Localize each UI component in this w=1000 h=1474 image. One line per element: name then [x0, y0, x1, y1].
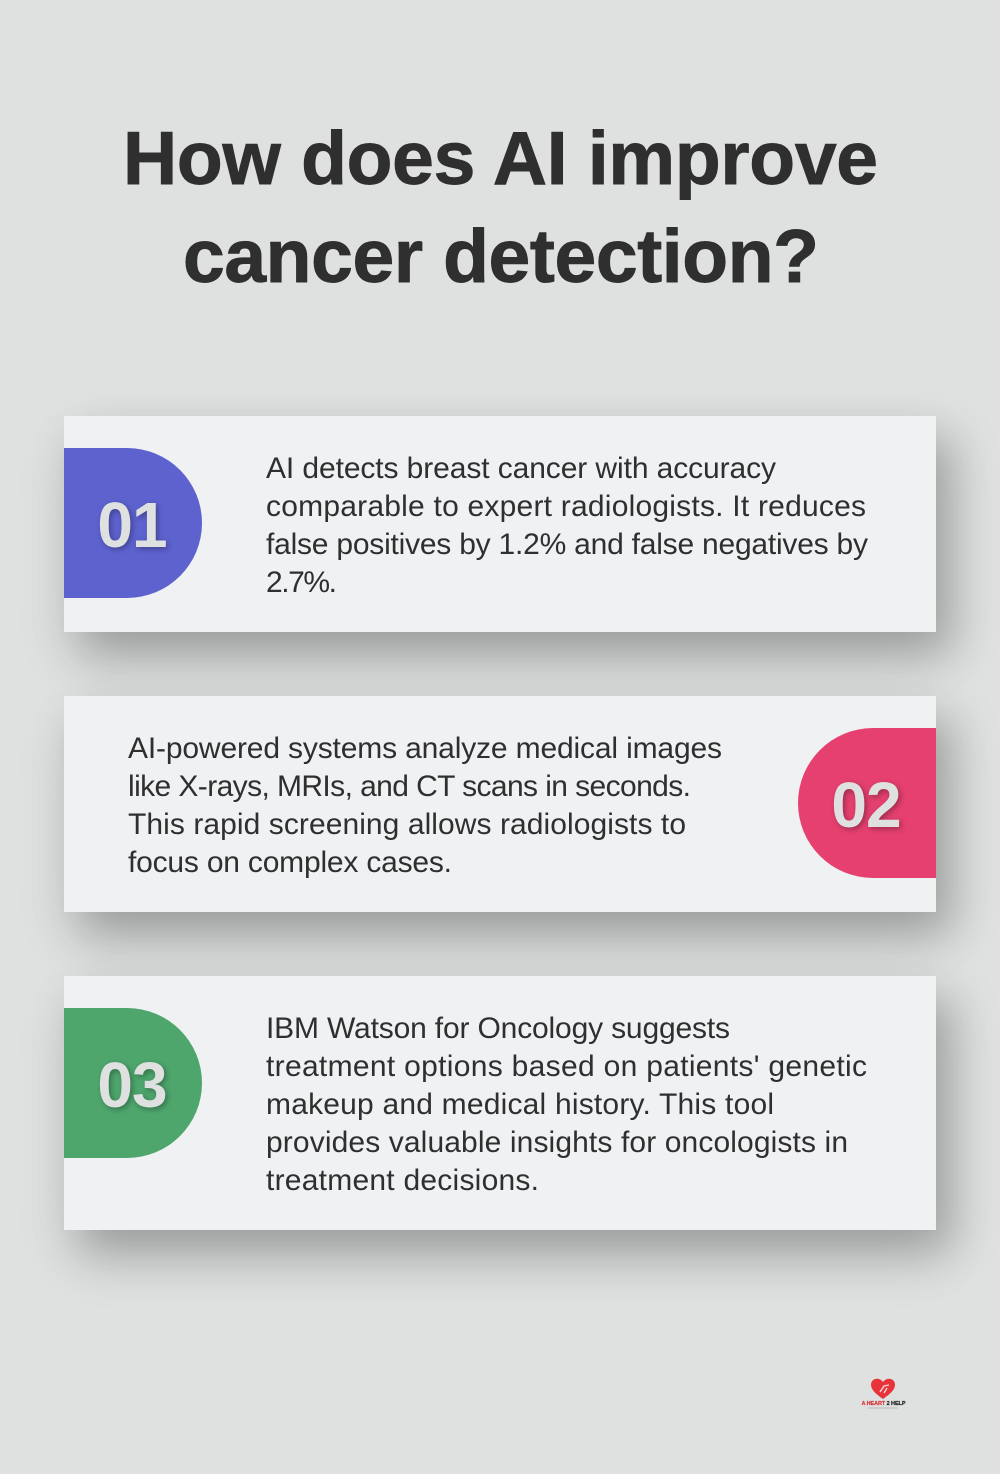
logo: A Heart 2 Help [862, 1378, 906, 1408]
text block: step 02: AI-powered systems analyze medical images [128, 732, 722, 765]
text block: step 03: makeup and medical history. This tool [266, 1088, 774, 1121]
text block: step 03: treatment options based on patients' genetic [266, 1050, 867, 1083]
badge: 02: 02 [831, 769, 901, 841]
panel: step 03 IBM Watson [64, 976, 936, 1230]
badge: 03 [64, 1008, 202, 1158]
text block: step 03 [266, 1012, 867, 1197]
badge: 02 [798, 728, 936, 878]
text block: step 03: IBM Watson for Oncology suggests [266, 1012, 730, 1045]
text block: step 02: focus on complex cases. [128, 846, 452, 879]
badge: 01 [64, 448, 202, 598]
text block: step 02: like X-rays, MRIs, and CT scans in seconds. [128, 770, 691, 803]
text block: step 03: provides valuable insights for oncologists in [266, 1126, 848, 1159]
badge: 01: 01 [97, 489, 167, 561]
text block: step 02 [128, 732, 722, 879]
logo: A Heart 2 Help: A HEART 2 HELP [862, 1401, 906, 1407]
text block: step 01: 2.7%. [266, 566, 337, 599]
text block: step 03: treatment decisions. [266, 1164, 539, 1197]
text block: step 01: AI detects breast cancer with accuracy [266, 452, 776, 485]
title: cancer detection? [183, 214, 819, 298]
title [123, 116, 878, 298]
text block: step 01: false positives by 1.2% and false negatives by [266, 528, 868, 561]
text block: step 02: This rapid screening allows radiologists to [128, 808, 686, 841]
text block: step 01 [266, 452, 868, 599]
panel: step 02 rapid screening [64, 696, 936, 912]
panel: step 01 breast cancer accuracy [64, 416, 936, 632]
text block: step 01: comparable to expert radiologists. It reduces [266, 490, 866, 523]
badge: 03: 03 [97, 1049, 167, 1121]
title: How does AI improve [123, 116, 878, 200]
